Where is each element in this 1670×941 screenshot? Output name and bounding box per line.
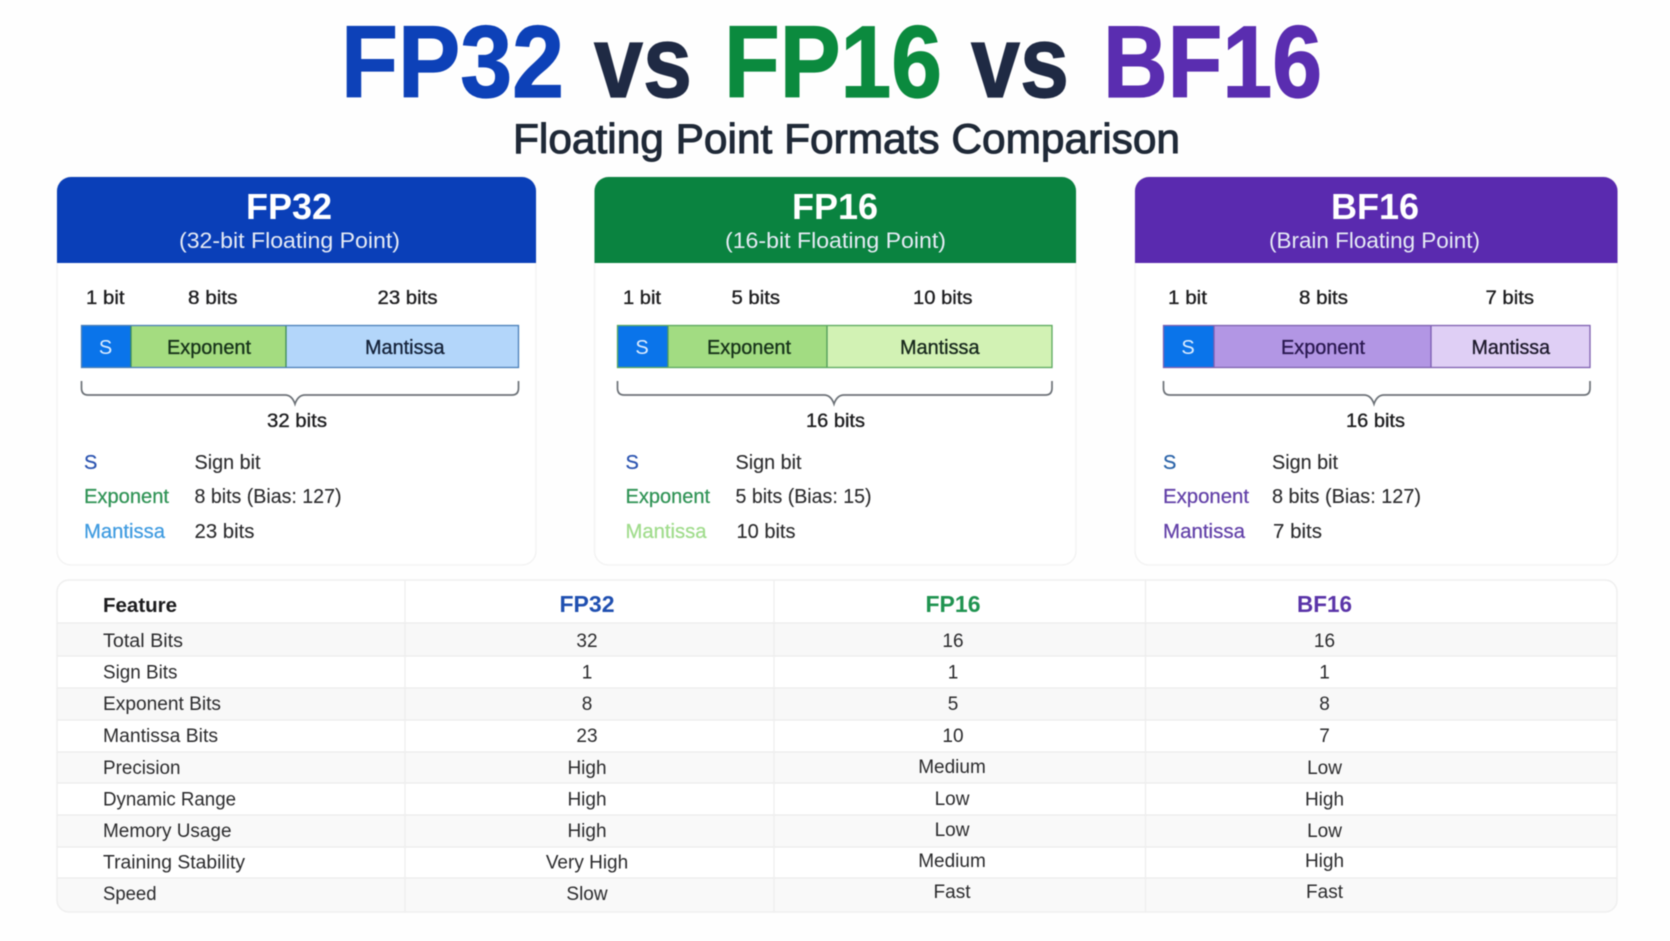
row: speed — [103, 882, 1344, 905]
FP32 legend: 23 bits — [194, 521, 254, 543]
row: training stability: Medium — [918, 851, 986, 872]
FP16 legend — [626, 452, 872, 543]
panel: BF16 — [1135, 177, 1618, 565]
FP32 panel header — [57, 177, 536, 263]
row: sign bits: 1 — [1319, 662, 1330, 684]
row: mantissa bits: 7 — [1319, 726, 1330, 747]
row: precision: Low — [1307, 758, 1342, 779]
BF16 bit layout bar: S — [1181, 337, 1195, 359]
BF16 panel header: BF16 — [1331, 186, 1419, 227]
FP32 legend: Mantissa — [84, 521, 166, 543]
row: dynamic range: High — [1305, 790, 1344, 810]
FP16 legend: S — [626, 452, 639, 474]
FP32 legend: Sign bit — [194, 452, 261, 474]
FP16 legend: 5 bits (Bias: 15) — [736, 486, 872, 508]
BF16 bit width labels — [1168, 287, 1534, 309]
FP16 total bits label: 16 bits — [806, 410, 865, 432]
subtitle: Floating Point Formats Comparison — [513, 115, 1180, 162]
FP32 bit layout bar: Mantissa — [365, 337, 445, 359]
row: sign bits: 1 — [582, 662, 592, 684]
BF16 panel header: (Brain Floating Point) — [1269, 228, 1480, 253]
row: total bits: 16 — [942, 631, 964, 652]
row: training stability: Very High — [546, 852, 628, 874]
FP32 total bits label: 32 bits — [267, 410, 327, 432]
FP32 bit width labels: 1 bit — [86, 287, 125, 309]
FP16 legend: 10 bits — [736, 521, 796, 543]
row: precision — [103, 757, 1342, 779]
table header row: FP16 — [926, 591, 980, 617]
FP16 legend: Exponent — [626, 486, 710, 508]
title: vs — [594, 5, 692, 119]
BF16 legend: Mantissa — [1163, 521, 1246, 543]
BF16 bit width labels: 7 bits — [1486, 287, 1534, 309]
row: mantissa bits: 23 — [576, 726, 598, 747]
FP32 total bits brace — [82, 381, 518, 404]
FP16 bit layout bar: Mantissa — [900, 337, 980, 359]
row: precision: Medium — [918, 757, 986, 778]
FP16 total bits brace — [618, 381, 1052, 404]
row: exponent bits: 5 — [948, 694, 958, 715]
FP32 bit layout bar — [82, 326, 518, 368]
row: dynamic range: Dynamic Range — [103, 790, 236, 810]
FP32 bit layout bar: Exponent — [167, 337, 251, 359]
BF16 bit width labels: 1 bit — [1168, 287, 1208, 309]
FP16 bit layout bar: Exponent — [707, 337, 791, 359]
FP32 bit width labels: 23 bits — [378, 287, 438, 309]
FP32 bit width labels: 8 bits — [188, 287, 238, 309]
FP32 bit width labels — [86, 287, 438, 309]
FP16 bit layout bar — [618, 326, 1052, 368]
FP16 legend: Sign bit — [736, 452, 802, 474]
table header row: FP32 — [560, 591, 614, 617]
BF16 legend: Exponent — [1163, 486, 1249, 508]
row: dynamic range: High — [567, 790, 607, 810]
title — [341, 5, 1322, 119]
row: speed: Fast — [934, 882, 971, 903]
row: training stability: High — [1305, 851, 1344, 872]
comparison table — [57, 580, 1617, 912]
row: training stability — [103, 851, 1344, 874]
table header row: Feature — [103, 594, 177, 617]
row: exponent bits: Exponent Bits — [103, 694, 221, 715]
FP32 panel header: FP32 — [246, 186, 332, 227]
FP16 bit width labels — [623, 287, 973, 309]
row: precision: High — [567, 758, 607, 779]
BF16 total bits brace — [1164, 381, 1590, 404]
row: training stability: Training Stability — [103, 852, 246, 874]
table header row — [103, 591, 1352, 617]
row: exponent bits: 8 — [582, 694, 592, 715]
FP32 legend: Exponent — [84, 486, 169, 508]
FP16 bit layout bar: S — [635, 337, 649, 359]
row: memory usage: High — [567, 821, 607, 842]
panel: FP32 — [57, 177, 536, 565]
BF16 total bits label: 16 bits — [1346, 410, 1405, 432]
row: exponent bits — [103, 694, 1330, 715]
title: FP16 — [724, 5, 942, 119]
row: mantissa bits: 10 — [942, 726, 964, 747]
row: sign bits: Sign Bits — [103, 662, 178, 684]
FP32 legend: 8 bits (Bias: 127) — [194, 486, 342, 508]
row: precision: Precision — [103, 758, 180, 779]
row: total bits: 32 — [576, 631, 598, 652]
row: mantissa bits — [103, 726, 1330, 747]
row: memory usage: Low — [1307, 821, 1342, 842]
row: dynamic range: Low — [935, 789, 970, 810]
row: speed: Slow — [566, 884, 608, 905]
table header row: BF16 — [1297, 591, 1352, 617]
FP32 legend: S — [84, 452, 97, 474]
row: exponent bits: 8 — [1319, 694, 1330, 715]
BF16 legend: 8 bits (Bias: 127) — [1272, 486, 1421, 508]
BF16 panel header — [1135, 177, 1618, 263]
row: total bits — [103, 631, 1335, 652]
row: dynamic range — [103, 789, 1344, 810]
FP16 bit width labels: 5 bits — [732, 287, 780, 309]
panel: FP16 — [594, 177, 1076, 565]
FP32 bit layout bar: S — [99, 337, 112, 359]
FP16 bit width labels: 1 bit — [623, 287, 662, 309]
title: vs — [971, 5, 1069, 119]
row: speed: Fast — [1306, 882, 1344, 903]
BF16 legend: S — [1163, 452, 1176, 474]
row: memory usage: Low — [935, 820, 970, 841]
row: sign bits — [103, 662, 1330, 684]
row: mantissa bits: Mantissa Bits — [103, 726, 218, 747]
BF16 bit width labels: 8 bits — [1299, 287, 1348, 309]
BF16 bit layout bar: Exponent — [1281, 337, 1365, 359]
BF16 legend: 7 bits — [1273, 521, 1322, 543]
FP32 legend — [84, 452, 342, 543]
FP16 bit width labels: 10 bits — [913, 287, 973, 309]
BF16 legend — [1163, 452, 1421, 543]
title: BF16 — [1103, 5, 1322, 119]
FP16 panel header — [594, 177, 1076, 263]
FP32 panel header: (32-bit Floating Point) — [179, 228, 400, 253]
FP16 panel header: FP16 — [792, 186, 878, 227]
BF16 legend: Sign bit — [1272, 452, 1338, 474]
title: FP32 — [341, 5, 564, 119]
BF16 bit layout bar — [1164, 326, 1590, 368]
row: memory usage — [103, 820, 1342, 842]
BF16 bit layout bar: Mantissa — [1472, 337, 1551, 359]
row: memory usage: Memory Usage — [103, 821, 232, 842]
row: speed: Speed — [103, 884, 156, 905]
FP16 legend: Mantissa — [626, 521, 707, 543]
row: sign bits: 1 — [948, 662, 958, 684]
row: total bits: 16 — [1314, 631, 1335, 652]
FP16 panel header: (16-bit Floating Point) — [725, 228, 946, 253]
row: total bits: Total Bits — [103, 631, 183, 652]
